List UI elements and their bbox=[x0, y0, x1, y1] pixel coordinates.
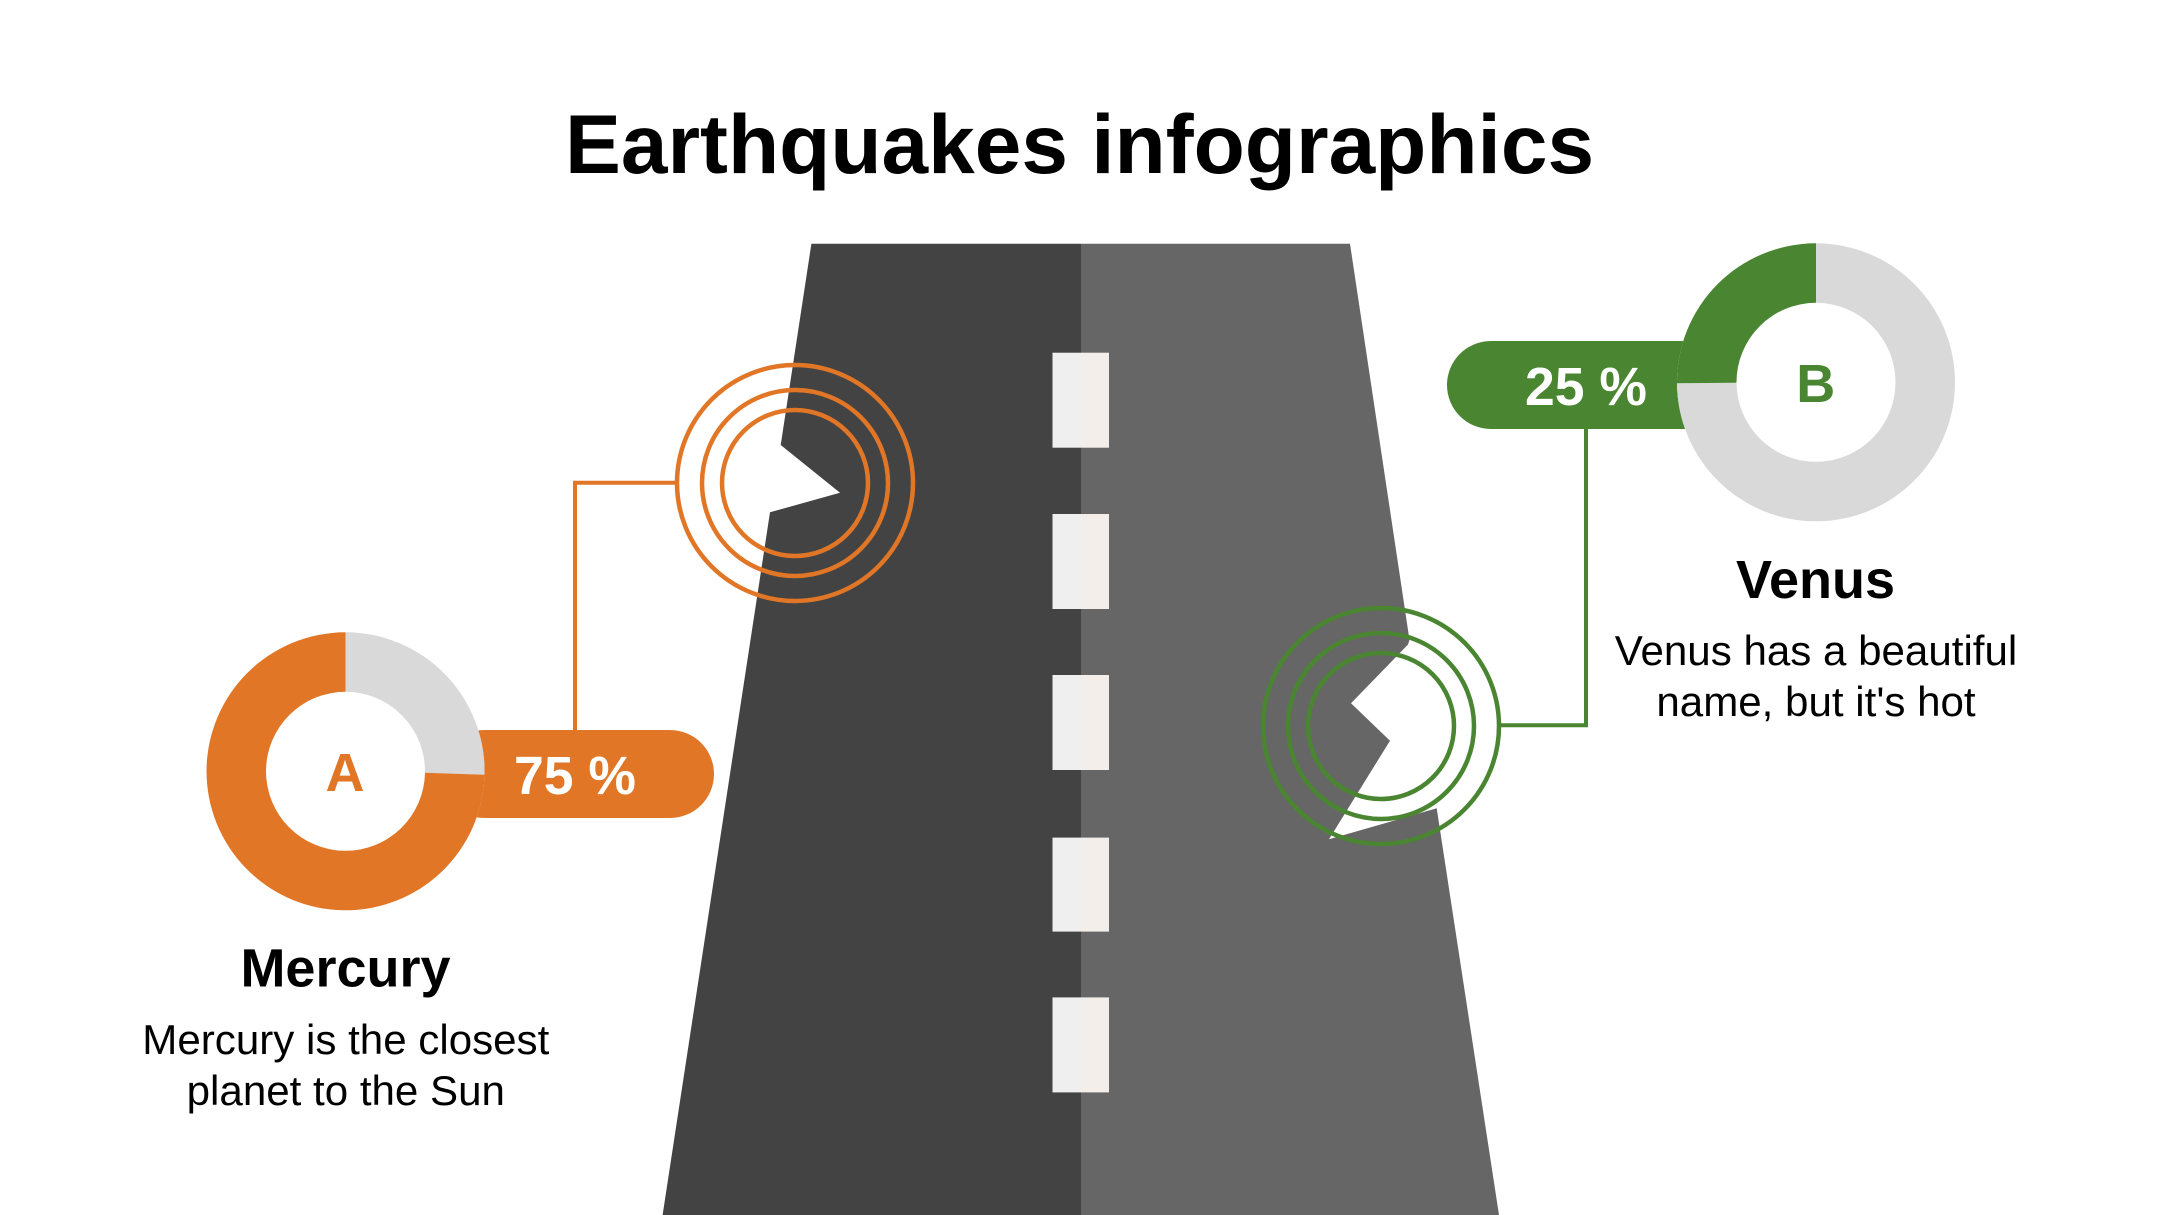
text block: Venus bbox=[1615, 550, 2017, 725]
icon: green seismic rings bbox=[1263, 608, 1499, 844]
road: centre dashes, right side bbox=[1081, 353, 1109, 1092]
pill: 25 percent: 25 % bbox=[1525, 358, 1647, 417]
road: centre dashes, left side bbox=[1052, 353, 1081, 1092]
donut chart: A 75% bbox=[206, 632, 485, 910]
text block: Venus: name, but it's hot bbox=[1656, 678, 1976, 725]
pill: 75 percent bbox=[440, 730, 714, 818]
road: right half with crack bbox=[1081, 244, 1499, 1215]
donut chart: B 25% bbox=[1677, 243, 1955, 521]
pill: 75 percent: 75 % bbox=[514, 747, 636, 806]
pill: 25 percent bbox=[1447, 341, 1747, 429]
text block: Venus: Venus bbox=[1736, 550, 1895, 610]
road: left half with crack bbox=[663, 244, 1081, 1215]
text block: Mercury bbox=[142, 938, 550, 1114]
text block: Mercury: Mercury is the closest bbox=[142, 1016, 550, 1063]
text block: Mercury: planet to the Sun bbox=[187, 1067, 505, 1114]
road bbox=[663, 244, 1499, 1215]
text block: Mercury: Mercury bbox=[240, 938, 451, 998]
donut chart: B 25%: B bbox=[1796, 354, 1835, 414]
connector: green bbox=[1499, 428, 1586, 725]
donut chart: A 75%: A bbox=[326, 743, 364, 803]
text block: Venus: Venus has a beautiful bbox=[1615, 627, 2017, 674]
icon: orange seismic rings bbox=[677, 365, 913, 601]
connector: orange bbox=[575, 483, 677, 732]
title: Earthquakes infographics bbox=[565, 97, 1594, 191]
